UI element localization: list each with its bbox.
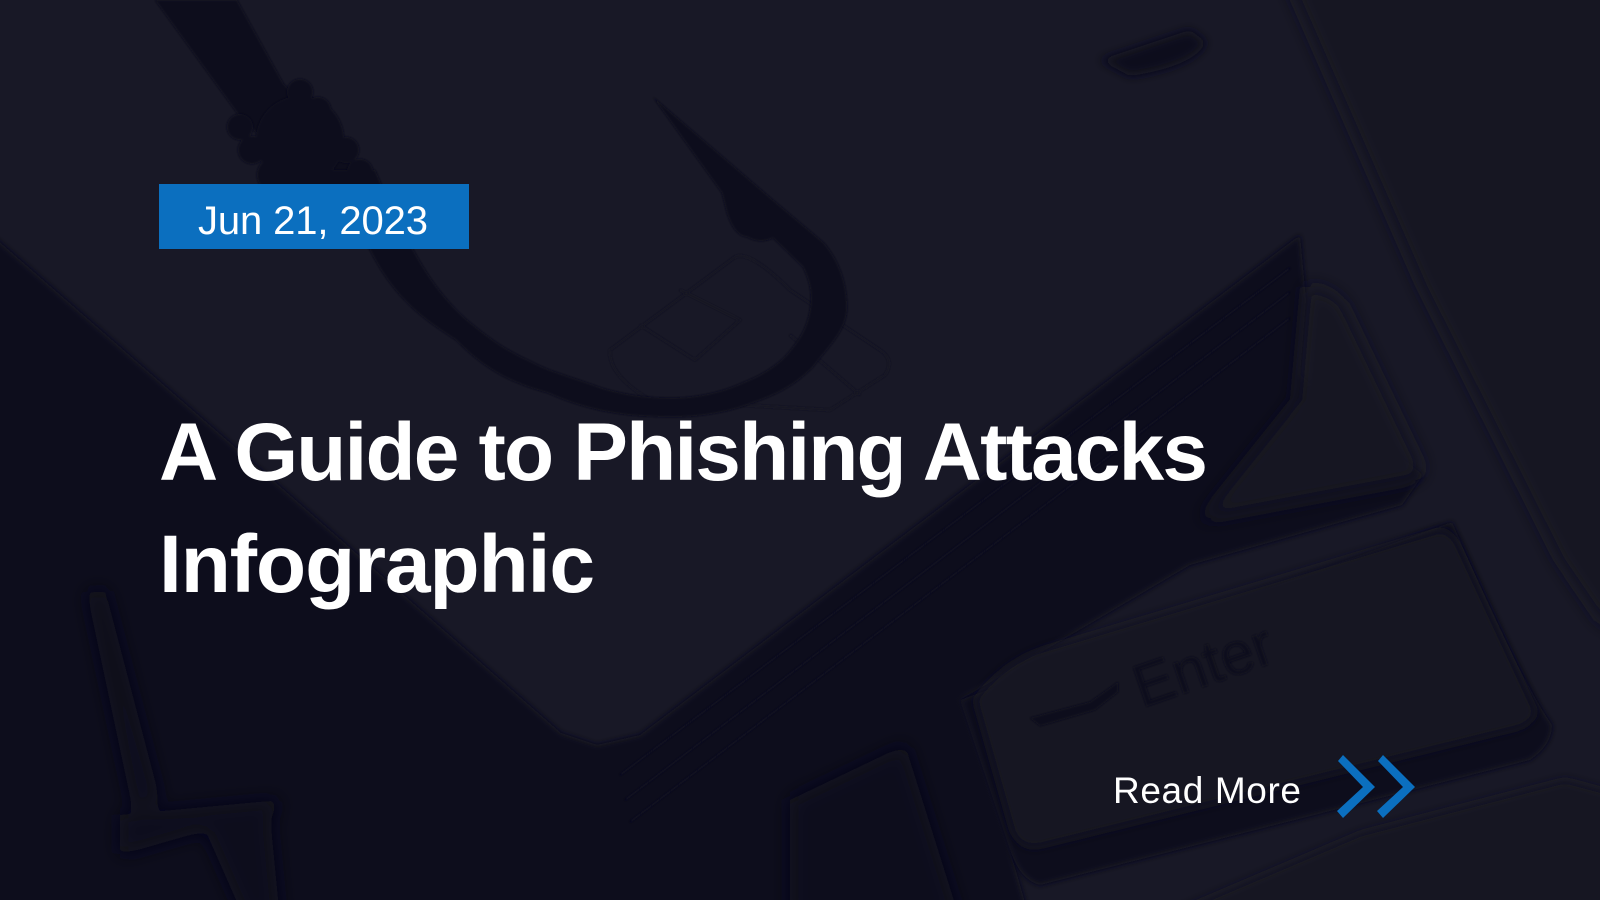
fishing hook silhouette — [155, 0, 847, 417]
upper right key — [1200, 286, 1422, 520]
SIM chip outline — [610, 256, 889, 410]
next key, bottom right — [1157, 780, 1600, 900]
lower-left keyboard gaps — [87, 590, 960, 900]
small key shadow at top — [1100, 30, 1206, 76]
enter key label: Enter — [1124, 610, 1282, 720]
hook shank knot — [227, 79, 395, 215]
read more link: Read More — [1113, 770, 1301, 811]
title: A Guide to Phishing Attacks — [159, 407, 1208, 498]
read more link — [1113, 755, 1415, 818]
icon: double chevron arrow — [1337, 755, 1415, 818]
stacked card edge lines — [620, 268, 1290, 822]
lower-left shadow and card stack — [0, 225, 1423, 900]
date badge — [159, 184, 469, 249]
title: Infographic — [159, 519, 595, 610]
title — [159, 407, 1208, 610]
top-right dark corner — [1287, 0, 1600, 640]
enter key — [960, 522, 1552, 885]
date text: Jun 21, 2023 — [198, 199, 428, 243]
